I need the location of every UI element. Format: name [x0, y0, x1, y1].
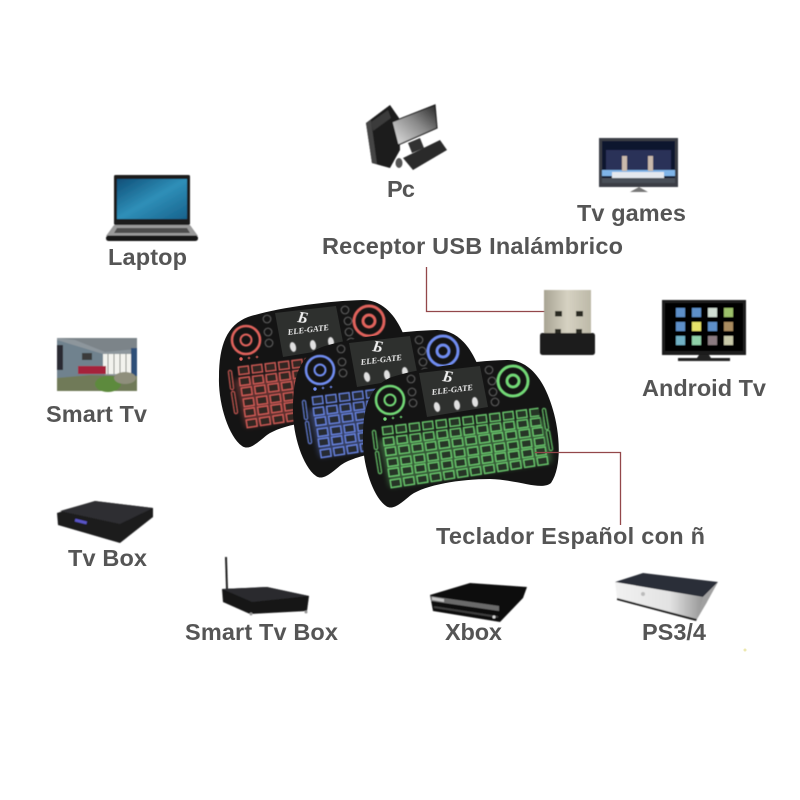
label: Pc: Pc [387, 176, 415, 202]
icon: PC [366, 105, 447, 170]
icon: Smart TV box with antenna [222, 557, 309, 616]
label: Tv Box: Tv Box [68, 545, 147, 571]
label: Teclador Español con ñ: Teclador Español con ñ [436, 523, 705, 549]
icon: TV games [599, 138, 678, 192]
label: Laptop: Laptop [108, 244, 187, 270]
label: PS3/4: PS3/4 [642, 619, 706, 645]
keyboard: blue backlight: ELE-GATE [359, 352, 403, 367]
label: Receptor USB Inalámbrico: Receptor USB Inalámbrico [322, 233, 623, 259]
label: Smart Tv Box: Smart Tv Box [185, 619, 338, 645]
decorative speck [744, 648, 746, 652]
label: Xbox: Xbox [445, 619, 502, 645]
label: Android Tv: Android Tv [642, 375, 766, 401]
keyboard: green backlight: Б [440, 368, 454, 386]
icon: PS3/4 console [615, 573, 718, 621]
icon: Android TV [662, 300, 746, 361]
keyboard: red backlight [219, 300, 415, 448]
keyboard: green backlight: ELE-GATE [430, 382, 474, 397]
keyboard: red backlight: Б [295, 309, 309, 327]
label: Tv games: Tv games [577, 200, 686, 226]
keyboard: red backlight: ELE-GATE [286, 322, 330, 337]
icon: Smart TV room photo [57, 338, 137, 392]
icon: USB receiver [540, 290, 595, 355]
keyboard: blue backlight: Б [370, 338, 384, 356]
icon: laptop [106, 175, 198, 241]
icon: TV box [57, 501, 153, 543]
keyboards [219, 300, 559, 508]
keyboard: green backlight [363, 360, 559, 508]
arrow: receiver callout line [426, 267, 556, 312]
arrow: keyboard callout line [535, 452, 620, 525]
keyboard: blue backlight [293, 330, 489, 478]
icon: Xbox [430, 583, 527, 622]
label: Smart Tv: Smart Tv [46, 401, 147, 427]
